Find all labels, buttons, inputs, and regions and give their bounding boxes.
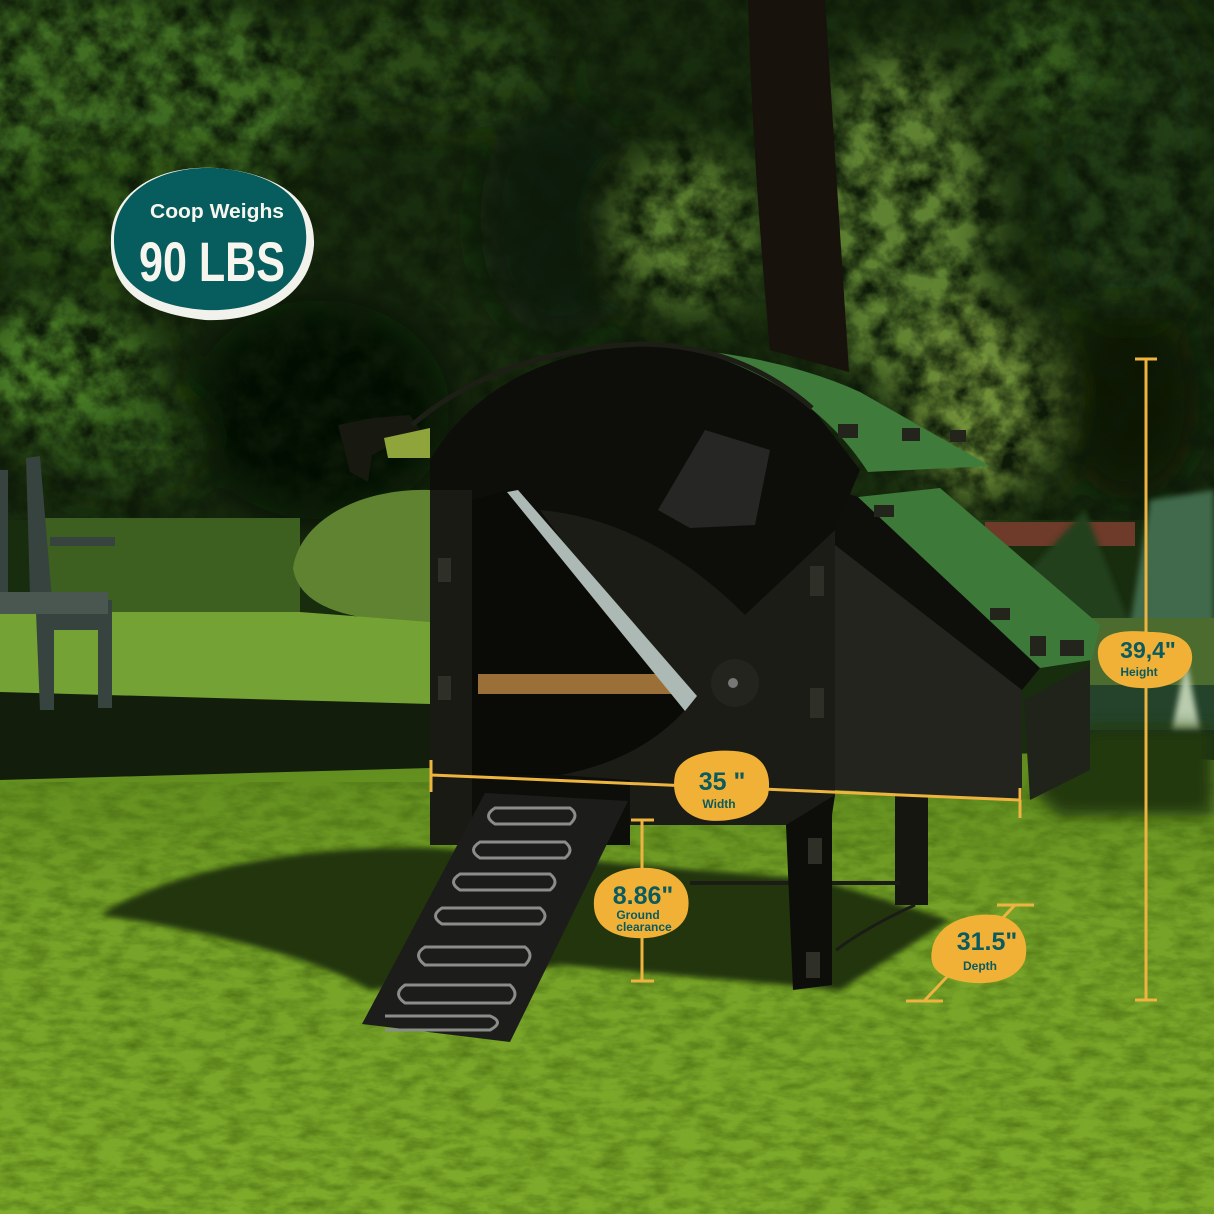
- coop shadow on grass: [100, 848, 950, 990]
- rear legs: [895, 790, 928, 905]
- doorway: [472, 490, 685, 775]
- tree trunk: [748, 0, 849, 372]
- round bush: [293, 490, 430, 622]
- hedge: [40, 518, 300, 614]
- roof clips: [838, 424, 1084, 656]
- callout: ground clearance: clearance: [616, 920, 672, 934]
- window reflection: [658, 430, 770, 528]
- callout: ground clearance: [594, 868, 689, 938]
- far garden: shrubs and fountain: [985, 490, 1214, 730]
- badge: coop weight: Coop Weighs: [150, 201, 284, 223]
- callout: depth: [931, 915, 1026, 983]
- callout: width: [674, 751, 769, 821]
- bench: [0, 456, 115, 710]
- roof arc edge: [412, 344, 812, 425]
- badge: coop weight: [111, 168, 314, 320]
- foreground grass: [0, 752, 1214, 1214]
- hook: [338, 415, 420, 482]
- dimension: height: [1098, 359, 1192, 1000]
- side panel: [835, 510, 1022, 800]
- callout: width: Width: [702, 797, 736, 811]
- callout: depth: Depth: [963, 959, 997, 973]
- nesting box: [1024, 665, 1090, 800]
- badge: coop weight: 90 LBS: [139, 230, 285, 293]
- main front body: [430, 344, 860, 990]
- callout: height: 39,4": [1120, 637, 1176, 663]
- grass texture: [0, 782, 1214, 1214]
- callout: height: Height: [1120, 665, 1158, 679]
- callout: depth: 31.5": [957, 928, 1017, 956]
- callout: ground clearance: 8.86": [613, 882, 673, 910]
- garden bed shadow: [0, 692, 430, 782]
- wood perch: [478, 674, 672, 694]
- dimension: ground clearance: [594, 820, 689, 981]
- upper green roof: [695, 350, 990, 472]
- coop: [338, 344, 1100, 1042]
- support bar: [507, 490, 697, 711]
- callout: height: [1098, 631, 1192, 688]
- left front pillar: [430, 490, 472, 845]
- callout: ground clearance: Ground: [616, 908, 660, 922]
- ramp: [362, 793, 628, 1042]
- round latch: [711, 659, 759, 707]
- panel fasteners: [438, 558, 824, 978]
- dimension: width: [431, 751, 1020, 821]
- dimension: depth: [906, 905, 1034, 1001]
- lower front panel: [540, 510, 835, 825]
- background: trees: [0, 0, 1214, 780]
- underside of lower roof: [835, 490, 1040, 690]
- mid lawn: [0, 612, 430, 706]
- lower green roof: [858, 488, 1100, 668]
- callout: width: 35 ": [699, 768, 745, 796]
- right lawn shadow: [1030, 728, 1214, 816]
